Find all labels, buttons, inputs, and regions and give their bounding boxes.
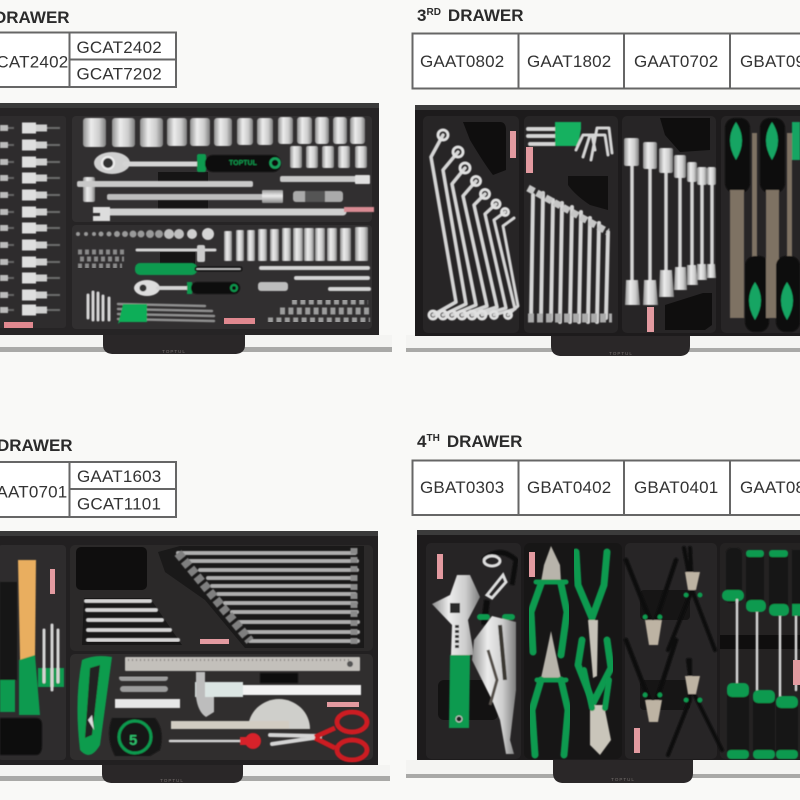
drawer handle: TOPTUL <box>160 778 184 783</box>
tools: hex keys with green holder <box>88 292 214 324</box>
panel: 4th drawer (bottom right) <box>406 432 800 783</box>
labels: drawer 3 tags <box>510 131 654 332</box>
heading: 4th drawer: 4 <box>417 432 426 451</box>
part number table: 2nd drawer: GCAT1101 <box>77 494 161 514</box>
tool: diagonal cutters <box>584 670 611 755</box>
tool: vernier caliper <box>195 672 361 717</box>
tool: locking pliers <box>472 616 516 754</box>
panel: 1st drawer (top left) <box>0 8 392 354</box>
tool set: hex keys with green holder <box>528 122 612 160</box>
part number table: 3rd drawer: GAAT0802 <box>420 52 504 71</box>
part number table: 4th drawer: GBAT0303 <box>420 478 504 497</box>
tool: water pump pliers <box>483 552 516 625</box>
part number table: 1st drawer <box>0 32 176 87</box>
tool: protractor <box>171 699 310 729</box>
part number table: 1st drawer: GCAT2402 <box>76 38 162 57</box>
tools: extension bars and breaker bar <box>77 175 374 221</box>
tool: large ratchet: TOPTUL <box>229 160 258 167</box>
tools: hammer and mallet <box>0 560 64 755</box>
part number table: 1st drawer: GCAT7202 <box>76 64 162 84</box>
part number table: 4th drawer <box>412 460 800 515</box>
tool: long nose pliers <box>576 552 611 703</box>
tool: red scissors <box>270 712 367 760</box>
tools: steel ruler <box>125 657 360 671</box>
tool set: top socket row <box>83 117 367 168</box>
drawer sill <box>406 335 800 352</box>
heading: 3rd drawer: DRAWER <box>448 6 523 25</box>
tool: tape measure <box>109 718 162 756</box>
tool set: combination spanners <box>528 188 612 322</box>
heading: 3rd drawer: 3 <box>417 6 426 25</box>
tools: small screwdriver, ratchet and bars <box>134 263 369 296</box>
part number table: 4th drawer: GBAT0402 <box>527 478 611 497</box>
tool set: screwdrivers <box>722 548 800 759</box>
tools: small wrench set <box>86 601 178 640</box>
foam tray <box>415 105 800 336</box>
part number table: 4th drawer: GBAT0401 <box>634 478 718 497</box>
tool: red-handled screwdriver <box>170 733 261 749</box>
drawer handle: TOPTUL <box>611 777 635 782</box>
panel: 2nd drawer (bottom left) <box>0 436 390 783</box>
drawer handle <box>103 334 245 354</box>
labels: drawer 2 tags <box>50 569 359 707</box>
tool: combination pliers <box>531 546 567 655</box>
tool: utility knife <box>77 656 112 755</box>
tool set: offset ring spanners <box>429 130 518 319</box>
drawer sill <box>0 765 390 781</box>
tool set: circlip pliers <box>626 548 722 755</box>
tools: small spanners and bar <box>115 678 180 708</box>
tools: loose bits <box>268 301 370 321</box>
tool set: flex socket spanners <box>624 138 716 305</box>
drawer handle <box>553 759 693 783</box>
tool: large ratchet <box>94 152 281 174</box>
tool: tape measure: 5 <box>129 732 137 749</box>
drawer handle <box>551 334 690 356</box>
foam tray <box>417 530 800 760</box>
part number table: 3rd drawer <box>412 34 800 88</box>
part number table: 3rd drawer: GAAT1802 <box>527 52 611 71</box>
drawer sill <box>406 760 800 778</box>
tool: adjustable wrench <box>432 575 480 728</box>
drawer handle: TOPTUL <box>162 349 186 354</box>
panel: 3rd drawer (top right) <box>406 6 800 356</box>
foam tray <box>0 103 379 335</box>
tools: small bit row and deep sockets <box>76 227 368 266</box>
part number table: 2nd drawer <box>0 462 176 517</box>
drawer handle: TOPTUL <box>609 351 633 356</box>
tool set: files <box>725 118 800 332</box>
foam tray <box>0 531 378 765</box>
part number table: 3rd drawer: GAAT0702 <box>634 52 718 71</box>
labels: drawer 1 tags <box>4 318 255 328</box>
part number table: 2nd drawer: GAAT1603 <box>77 467 161 486</box>
drawer sill <box>0 335 392 352</box>
tools: large wrench set <box>178 548 358 645</box>
tool set: bit sockets <box>0 128 60 310</box>
labels: drawer 4 tags <box>437 552 800 753</box>
tool: needle nose pliers <box>532 631 568 755</box>
drawer handle <box>102 764 243 783</box>
heading: 3rd drawer: RD <box>426 7 441 18</box>
heading: 4th drawer: TH <box>426 433 440 444</box>
heading: 4th drawer: DRAWER <box>447 432 522 451</box>
